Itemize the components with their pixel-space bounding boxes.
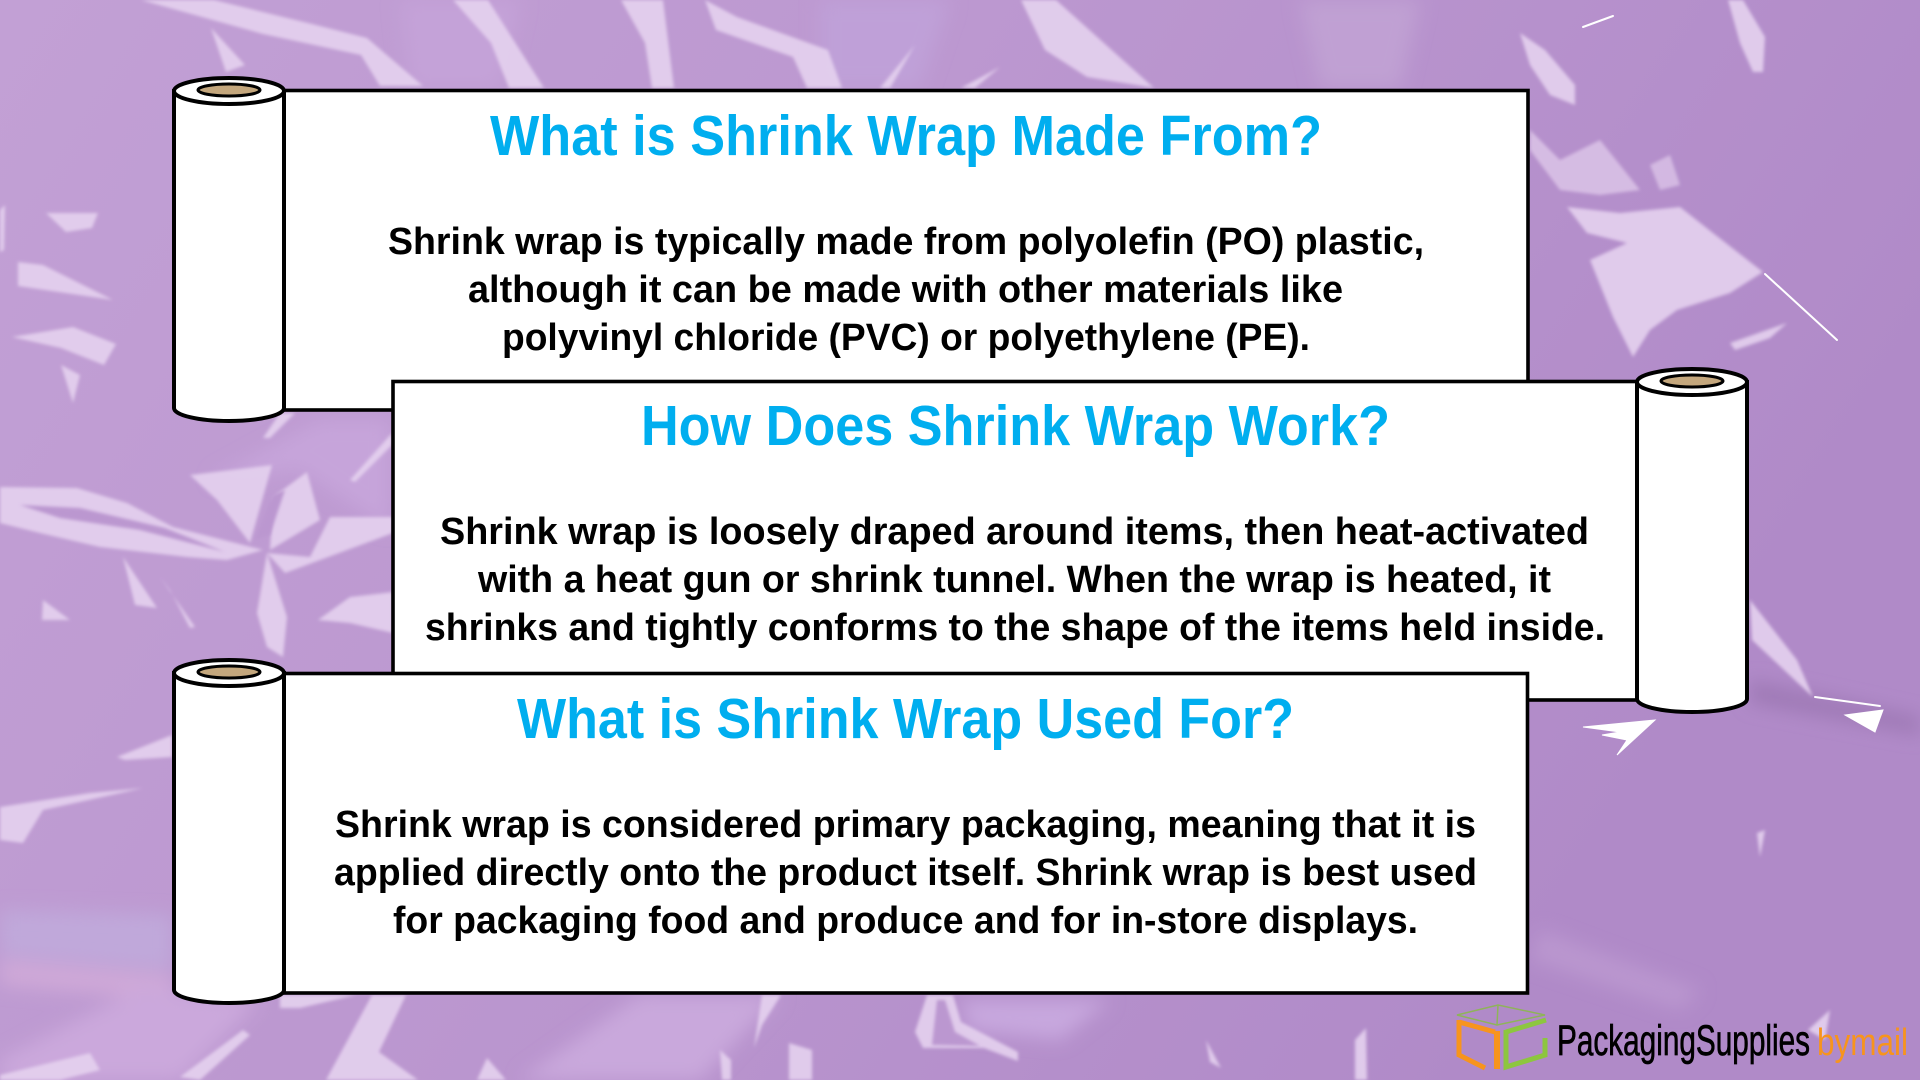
panel 2 body text: shrinks and tightly conforms to the shape of the items held inside. xyxy=(425,607,1605,649)
panel 1 body text: although it can be made with other materials like xyxy=(468,269,1343,311)
panel 1 body text: polyvinyl chloride (PVC) or polyethylene (PE). xyxy=(502,317,1310,359)
panel 3 body text xyxy=(334,804,1477,942)
panel 2 sheet xyxy=(393,382,1640,700)
panel 1 roll icon xyxy=(174,78,284,421)
panel 1 sheet xyxy=(284,90,1528,410)
panel 2 body text: Shrink wrap is loosely draped around items, then heat-activated xyxy=(440,511,1589,553)
panel 2 body text xyxy=(425,511,1605,649)
panel 2 body text: with a heat gun or shrink tunnel. When the wrap is heated, it xyxy=(477,559,1551,601)
panel 2: how does shrink wrap work xyxy=(393,369,1747,712)
panel 3 roll icon xyxy=(174,660,284,1003)
logo wordmark: PackagingSupplies xyxy=(1557,1017,1810,1065)
icon: box xyxy=(1457,1005,1546,1069)
panel 1 heading: What is Shrink Wrap Made From? xyxy=(490,104,1322,168)
panel 3 body text: applied directly onto the product itself. Shrink wrap is best used xyxy=(334,852,1477,894)
panel 1 body text xyxy=(388,221,1424,359)
panel 3: what is shrink wrap used for xyxy=(174,660,1528,1003)
panel 1 body text: Shrink wrap is typically made from polyolefin (PO) plastic, xyxy=(388,221,1424,263)
panel 2 heading: How Does Shrink Wrap Work? xyxy=(641,394,1390,458)
panel 3 heading: What is Shrink Wrap Used For? xyxy=(517,687,1294,751)
panel 3 body text: Shrink wrap is considered primary packaging, meaning that it is xyxy=(335,804,1476,846)
panel 2 roll icon xyxy=(1637,369,1747,712)
logo: Packaging Supplies by mail xyxy=(1457,1005,1908,1069)
panel 3 sheet xyxy=(284,674,1528,993)
panel 3 body text: for packaging food and produce and for in-store displays. xyxy=(393,900,1418,942)
panel 1: what is shrink wrap made from xyxy=(174,78,1528,421)
